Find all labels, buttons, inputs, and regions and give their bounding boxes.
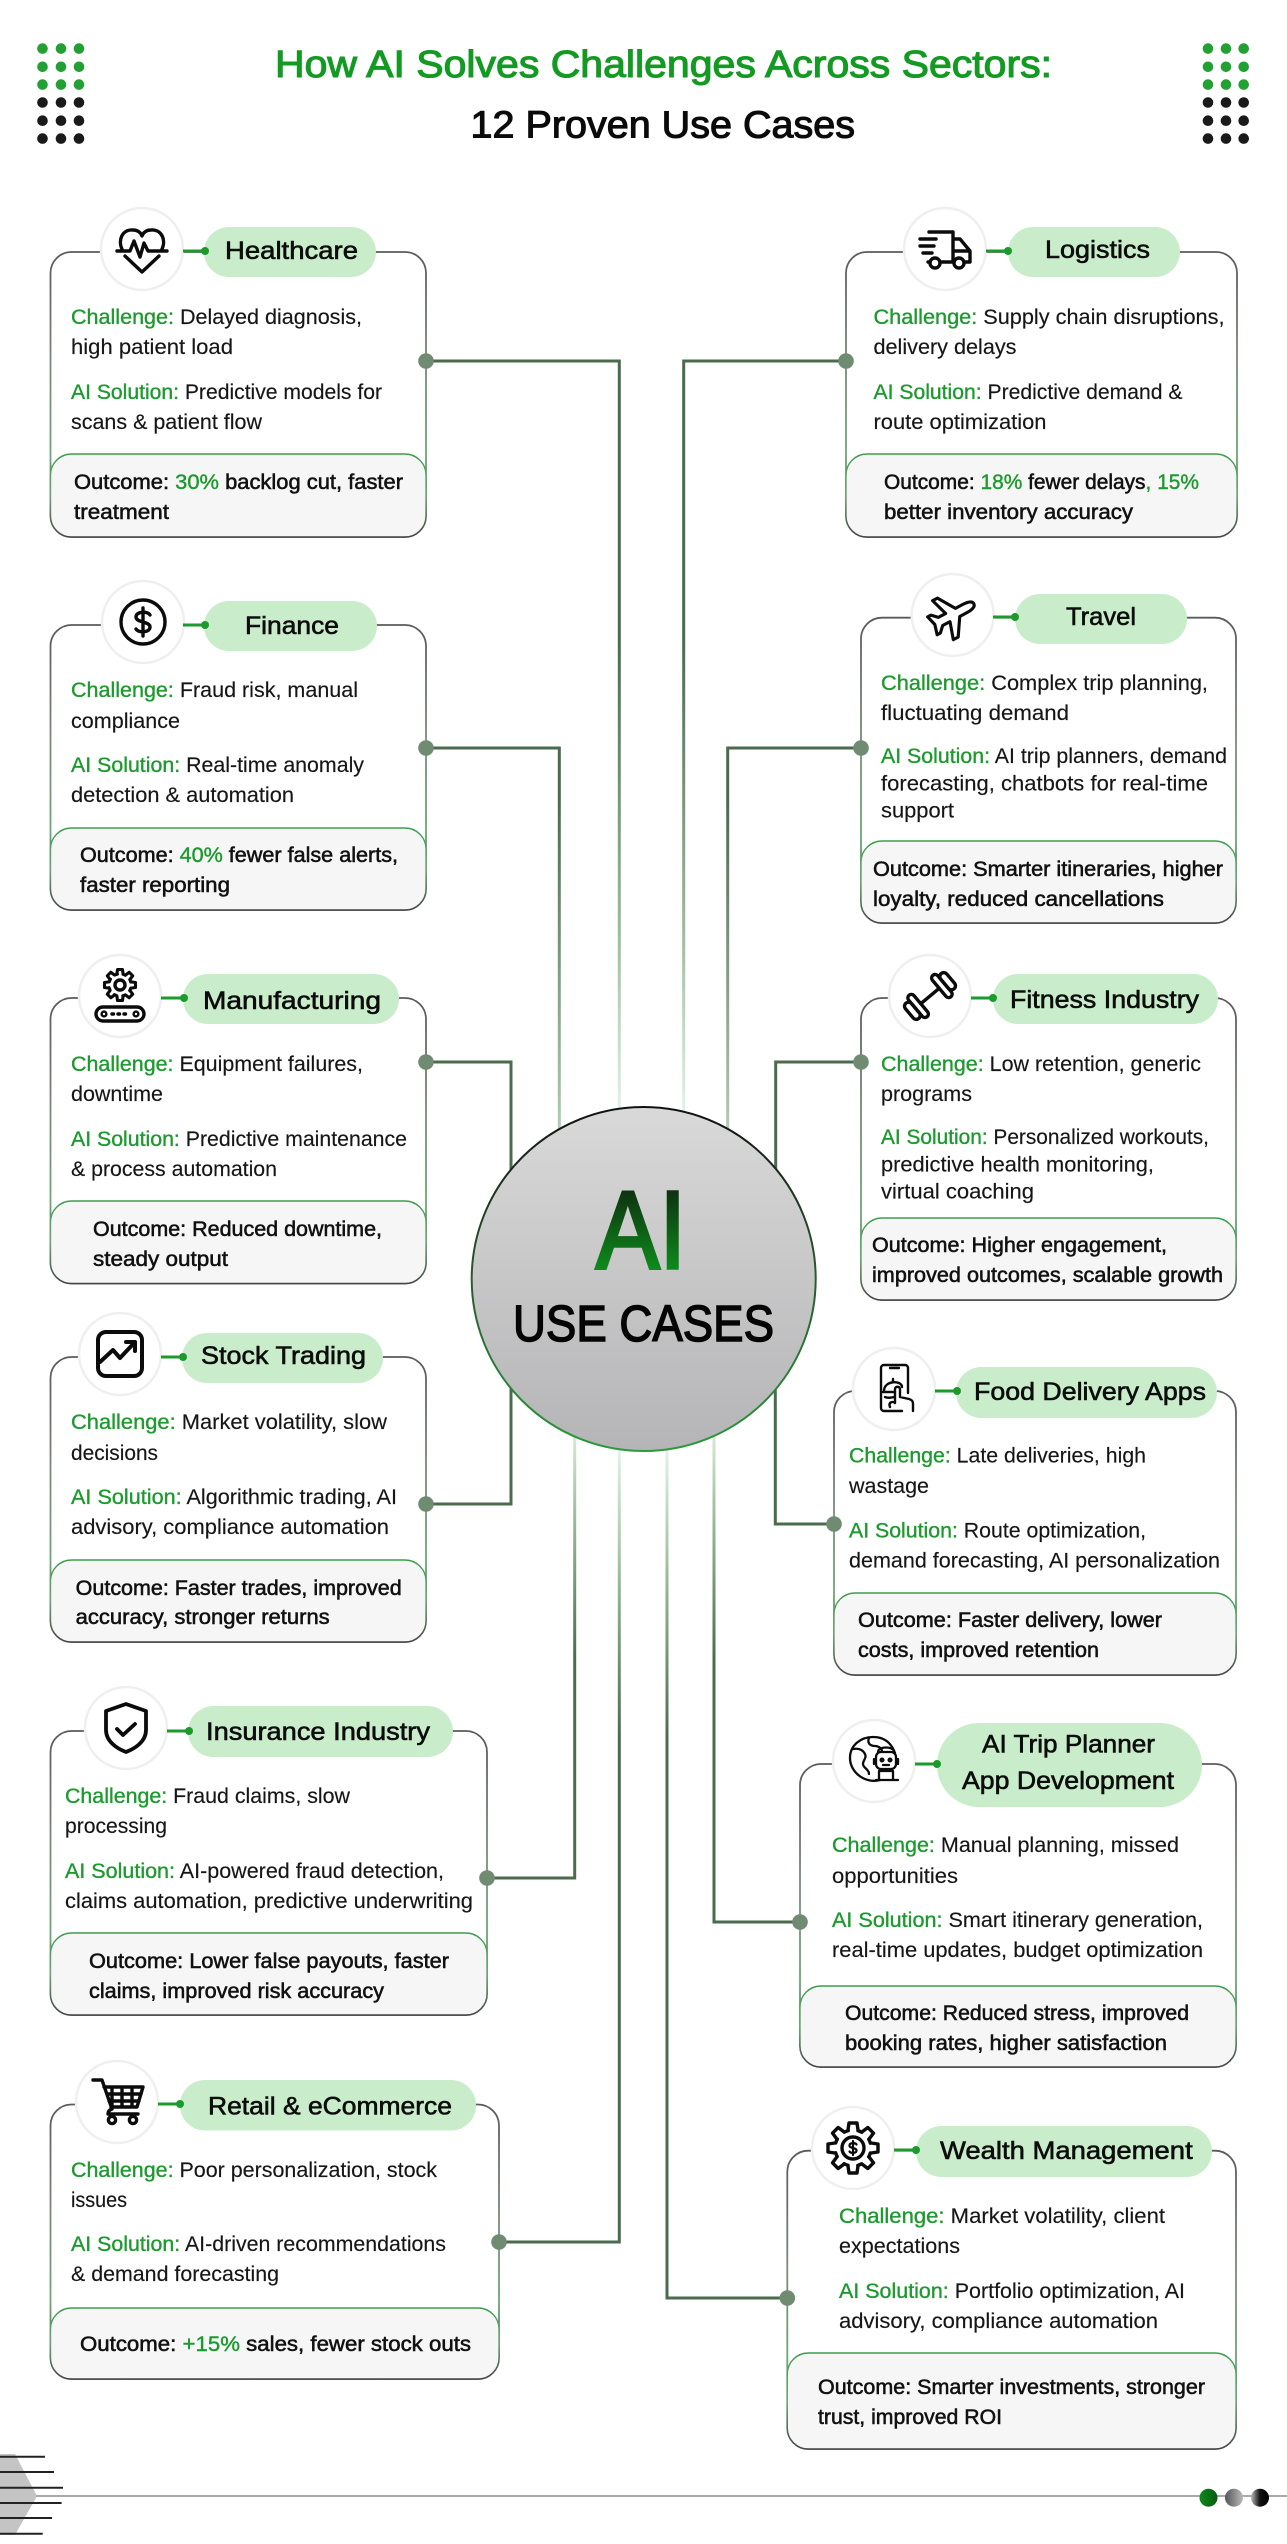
icon: dumbbell xyxy=(889,955,971,1037)
challenge and solution: Fitness Industry: predictive health monitoring, xyxy=(881,1154,1154,1177)
challenge and solution: Travel: fluctuating demand xyxy=(881,702,1069,725)
label: Logistics: Logistics xyxy=(1045,236,1150,264)
card: AI Trip Planner App Development xyxy=(792,1720,1236,2067)
outcome: Logistics xyxy=(846,454,1237,537)
icon: gear on conveyor xyxy=(79,955,161,1037)
challenge and solution: Logistics: AI Solution: Predictive demand & xyxy=(874,381,1182,404)
label: Food Delivery Apps xyxy=(956,1367,1217,1418)
connector: AI Trip Planner App Development xyxy=(915,1760,941,1768)
challenge and solution: Travel: Challenge: Complex trip planning, xyxy=(881,672,1208,695)
challenge and solution: Food Delivery Apps: Challenge: Late deliveries, high xyxy=(849,1444,1146,1468)
icon: phone with food cloche xyxy=(853,1348,935,1430)
challenge and solution: Wealth Management: Challenge: Market volatility, client xyxy=(839,2205,1165,2228)
label: Wealth Management xyxy=(916,2126,1212,2177)
label: Fitness Industry: Fitness Industry xyxy=(1010,986,1200,1014)
challenge and solution: Healthcare: Challenge: Delayed diagnosis, xyxy=(71,306,362,329)
challenge and solution: Fitness Industry: virtual coaching xyxy=(881,1181,1034,1204)
challenge and solution: AI Trip Planner App Development: opportunities xyxy=(832,1865,958,1888)
outcome: Stock Trading: Outcome: Faster trades, improved xyxy=(76,1577,402,1600)
title: How AI Solves Challenges Across Sectors: xyxy=(275,44,1052,86)
icon: airplane xyxy=(912,574,994,656)
challenge and solution: Manufacturing: Challenge: Equipment failures, xyxy=(71,1053,363,1076)
challenge and solution: Retail & eCommerce: issues xyxy=(71,2189,127,2212)
card: Logistics xyxy=(838,208,1237,537)
icon: shopping cart xyxy=(76,2061,158,2143)
challenge and solution: Finance: AI Solution: Real-time anomaly xyxy=(71,754,365,777)
card: Retail & eCommerce xyxy=(50,2061,507,2379)
challenge and solution: AI Trip Planner App Development: real-time updates, budget optimization xyxy=(832,1939,1203,1962)
footer: three dots xyxy=(1200,2489,1269,2507)
outcome: Wealth Management xyxy=(787,2353,1236,2449)
card: Healthcare xyxy=(50,208,434,537)
challenge and solution: Stock Trading: decisions xyxy=(71,1442,158,1465)
connector: Manufacturing xyxy=(161,994,188,1002)
challenge and solution: Stock Trading: AI Solution: Algorithmic trading, AI xyxy=(71,1486,397,1509)
footer: horizontal rule xyxy=(36,2495,1287,2497)
outcome: Wealth Management: trust, improved ROI xyxy=(818,2406,1002,2429)
challenge and solution: Insurance Industry: claims automation, predictive underwriting xyxy=(65,1890,473,1913)
outcome: Fitness Industry: improved outcomes, scalable growth xyxy=(872,1264,1223,1287)
outcome: Travel xyxy=(861,841,1236,923)
card: Manufacturing xyxy=(50,955,434,1284)
challenge and solution: Finance: detection & automation xyxy=(71,784,294,807)
challenge and solution: Fitness Industry: Challenge: Low retention, generic xyxy=(881,1053,1201,1076)
challenge and solution: Finance: compliance xyxy=(71,710,180,733)
challenge and solution: Wealth Management: AI Solution: Portfolio optimization, AI xyxy=(839,2280,1185,2303)
challenge and solution: Wealth Management: expectations xyxy=(839,2235,960,2258)
icon: globe with robot xyxy=(833,1720,915,1802)
challenge and solution: Insurance Industry xyxy=(65,1785,473,1913)
center circle: AI use cases xyxy=(472,1107,816,1451)
outcome: Travel: loyalty, reduced cancellations xyxy=(873,888,1164,911)
challenge and solution: Logistics: delivery delays xyxy=(874,336,1016,359)
challenge and solution: Stock Trading: advisory, compliance automation xyxy=(71,1516,389,1539)
outcome: Food Delivery Apps: Outcome: Faster delivery, lower xyxy=(858,1609,1162,1632)
center circle: AI use cases: USE CASES xyxy=(513,1295,774,1352)
challenge and solution: Food Delivery Apps: wastage xyxy=(848,1475,929,1498)
challenge and solution: Retail & eCommerce: Challenge: Poor personalization, stock xyxy=(71,2159,438,2182)
decorative dot grid right xyxy=(1203,43,1249,144)
challenge and solution: Healthcare: AI Solution: Predictive models for xyxy=(71,381,382,404)
label: Retail & eCommerce xyxy=(180,2080,476,2130)
outcome: Wealth Management: Outcome: Smarter investments, stronger xyxy=(818,2376,1205,2399)
challenge and solution: Food Delivery Apps: demand forecasting, AI personalization xyxy=(849,1550,1220,1573)
outcome: Manufacturing: Outcome: Reduced downtime, xyxy=(93,1218,382,1241)
outcome: Healthcare: treatment xyxy=(74,501,169,524)
outcome: AI Trip Planner App Development: booking rates, higher satisfaction xyxy=(845,2032,1167,2055)
outcome: Fitness Industry xyxy=(861,1218,1236,1300)
label: Wealth Management: Wealth Management xyxy=(940,2137,1193,2165)
title: 12 Proven Use Cases xyxy=(470,104,855,146)
challenge and solution: Healthcare xyxy=(71,306,382,434)
outcome: Finance xyxy=(50,828,426,910)
outcome: Stock Trading xyxy=(50,1560,426,1642)
challenge and solution: Fitness Industry xyxy=(881,1053,1209,1204)
label: Healthcare xyxy=(204,227,376,277)
label: Manufacturing: Manufacturing xyxy=(203,987,381,1015)
connector: Retail & eCommerce xyxy=(158,2100,184,2108)
icon: shield check xyxy=(85,1687,167,1769)
icon: heart with pulse xyxy=(101,208,183,290)
challenge and solution: Retail & eCommerce xyxy=(71,2159,446,2286)
challenge and solution: Logistics: Challenge: Supply chain disruptions, xyxy=(874,306,1224,329)
label: Finance: Finance xyxy=(245,612,339,640)
outcome: Healthcare xyxy=(50,454,426,537)
title xyxy=(275,44,1052,146)
challenge and solution: Logistics xyxy=(874,306,1224,434)
challenge and solution: Healthcare: high patient load xyxy=(71,336,233,359)
challenge and solution: Food Delivery Apps: AI Solution: Route optimization, xyxy=(849,1520,1146,1542)
card: Fitness Industry xyxy=(853,955,1236,1300)
label: Manufacturing xyxy=(183,974,399,1024)
card: Wealth Management xyxy=(780,2107,1236,2449)
card: Travel xyxy=(853,574,1236,923)
outcome: Travel: Outcome: Smarter itineraries, higher xyxy=(873,858,1223,881)
outcome: Healthcare: Outcome: 30% backlog cut, faster xyxy=(74,471,403,494)
label: Travel: Travel xyxy=(1066,603,1136,631)
outcome: Manufacturing xyxy=(50,1201,426,1284)
card: Finance xyxy=(50,581,434,910)
connector: Insurance Industry xyxy=(167,1727,193,1735)
outcome: AI Trip Planner App Development xyxy=(800,1986,1236,2067)
icon: gear with dollar xyxy=(812,2107,894,2189)
challenge and solution: Manufacturing: downtime xyxy=(71,1083,163,1106)
challenge and solution: Manufacturing xyxy=(71,1053,407,1181)
outcome: Fitness Industry: Outcome: Higher engagement, xyxy=(872,1234,1167,1257)
challenge and solution: Food Delivery Apps xyxy=(848,1444,1220,1573)
label: Stock Trading: Stock Trading xyxy=(201,1342,366,1370)
challenge and solution: Manufacturing: & process automation xyxy=(71,1158,277,1181)
challenge and solution: Logistics: route optimization xyxy=(874,411,1046,434)
label: Retail & eCommerce: Retail & eCommerce xyxy=(208,2092,452,2120)
footer: left hexagon with lines xyxy=(0,2454,63,2535)
challenge and solution: Retail & eCommerce: & demand forecasting xyxy=(71,2263,279,2286)
connector: Food Delivery Apps xyxy=(935,1387,961,1395)
connector: Logistics xyxy=(986,247,1012,255)
challenge and solution: AI Trip Planner App Development: Challenge: Manual planning, missed xyxy=(832,1834,1179,1857)
card: Food Delivery Apps xyxy=(826,1348,1236,1675)
outcome: Food Delivery Apps xyxy=(834,1593,1236,1675)
challenge and solution: Manufacturing: AI Solution: Predictive maintenance xyxy=(71,1128,407,1151)
challenge and solution: Fitness Industry: programs xyxy=(881,1083,972,1106)
challenge and solution: Travel: AI Solution: AI trip planners, demand xyxy=(881,745,1227,768)
center circle: AI use cases: AI xyxy=(596,1169,686,1292)
label: Logistics xyxy=(1008,227,1180,277)
label: Food Delivery Apps: Food Delivery Apps xyxy=(974,1378,1206,1406)
outcome: Insurance Industry xyxy=(50,1933,487,2015)
label: Insurance Industry: Insurance Industry xyxy=(206,1718,431,1746)
connector: Wealth Management xyxy=(894,2146,920,2154)
outcome: Stock Trading: accuracy, stronger returns xyxy=(76,1606,330,1629)
challenge and solution: Travel: forecasting, chatbots for real-time xyxy=(881,772,1208,796)
outcome: Finance: Outcome: 40% fewer false alerts, xyxy=(80,844,398,867)
connector: Healthcare xyxy=(183,247,209,255)
label: Stock Trading xyxy=(182,1333,383,1383)
connector: Finance xyxy=(183,621,209,629)
connector: Stock Trading xyxy=(161,1353,187,1361)
challenge and solution: Insurance Industry: processing xyxy=(65,1815,167,1838)
label: AI Trip Planner App Development: AI Trip Planner xyxy=(982,1730,1155,1758)
connector: Travel xyxy=(993,613,1019,621)
challenge and solution: Insurance Industry: Challenge: Fraud claims, slow xyxy=(65,1785,351,1808)
outcome: Manufacturing: steady output xyxy=(93,1248,228,1271)
outcome: Logistics: Outcome: 18% fewer delays, 15% xyxy=(884,471,1199,494)
label: Healthcare: Healthcare xyxy=(225,237,358,265)
label: Fitness Industry xyxy=(993,974,1218,1024)
challenge and solution: AI Trip Planner App Development xyxy=(832,1834,1203,1962)
challenge and solution: Stock Trading xyxy=(71,1411,397,1539)
challenge and solution: Finance xyxy=(71,679,365,807)
outcome: Insurance Industry: Outcome: Lower false payouts, faster xyxy=(89,1950,449,1973)
label: Finance xyxy=(204,601,377,651)
challenge and solution: Fitness Industry: AI Solution: Personalized workouts, xyxy=(881,1126,1209,1149)
outcome: Insurance Industry: claims, improved risk accuracy xyxy=(89,1980,385,2003)
card: Stock Trading xyxy=(50,1313,434,1642)
challenge and solution: AI Trip Planner App Development: AI Solution: Smart itinerary generation, xyxy=(832,1909,1203,1932)
card: Insurance Industry xyxy=(50,1687,495,2015)
icon: delivery truck xyxy=(904,208,986,290)
label: Travel xyxy=(1015,594,1187,644)
challenge and solution: Finance: Challenge: Fraud risk, manual xyxy=(71,679,358,702)
outcome: AI Trip Planner App Development: Outcome: Reduced stress, improved xyxy=(845,2002,1189,2025)
label: AI Trip Planner App Development: App Development xyxy=(962,1767,1174,1795)
label: AI Trip Planner App Development xyxy=(937,1723,1202,1807)
outcome: Retail & eCommerce: Outcome: +15% sales, fewer stock outs xyxy=(80,2333,471,2356)
connector lines xyxy=(426,361,861,2298)
challenge and solution: Retail & eCommerce: AI Solution: AI-driven recommendations xyxy=(71,2233,446,2256)
outcome: Food Delivery Apps: costs, improved retention xyxy=(858,1639,1099,1662)
challenge and solution: Wealth Management xyxy=(839,2205,1185,2333)
outcome: Logistics: better inventory accuracy xyxy=(884,501,1134,524)
challenge and solution: Wealth Management: advisory, compliance automation xyxy=(839,2310,1158,2333)
challenge and solution: Travel xyxy=(881,672,1227,822)
icon: chart arrow xyxy=(79,1313,161,1395)
icon: dollar coin xyxy=(102,581,184,663)
challenge and solution: Healthcare: scans & patient flow xyxy=(71,411,263,434)
outcome: Retail & eCommerce xyxy=(50,2308,499,2379)
connector: Fitness Industry xyxy=(971,994,997,1002)
challenge and solution: Stock Trading: Challenge: Market volatility, slow xyxy=(71,1411,388,1434)
outcome: Finance: faster reporting xyxy=(80,874,230,897)
decorative dot grid left xyxy=(37,43,84,144)
challenge and solution: Travel: support xyxy=(881,800,954,822)
challenge and solution: Insurance Industry: AI Solution: AI-powered fraud detection, xyxy=(65,1860,444,1883)
label: Insurance Industry xyxy=(188,1706,453,1757)
